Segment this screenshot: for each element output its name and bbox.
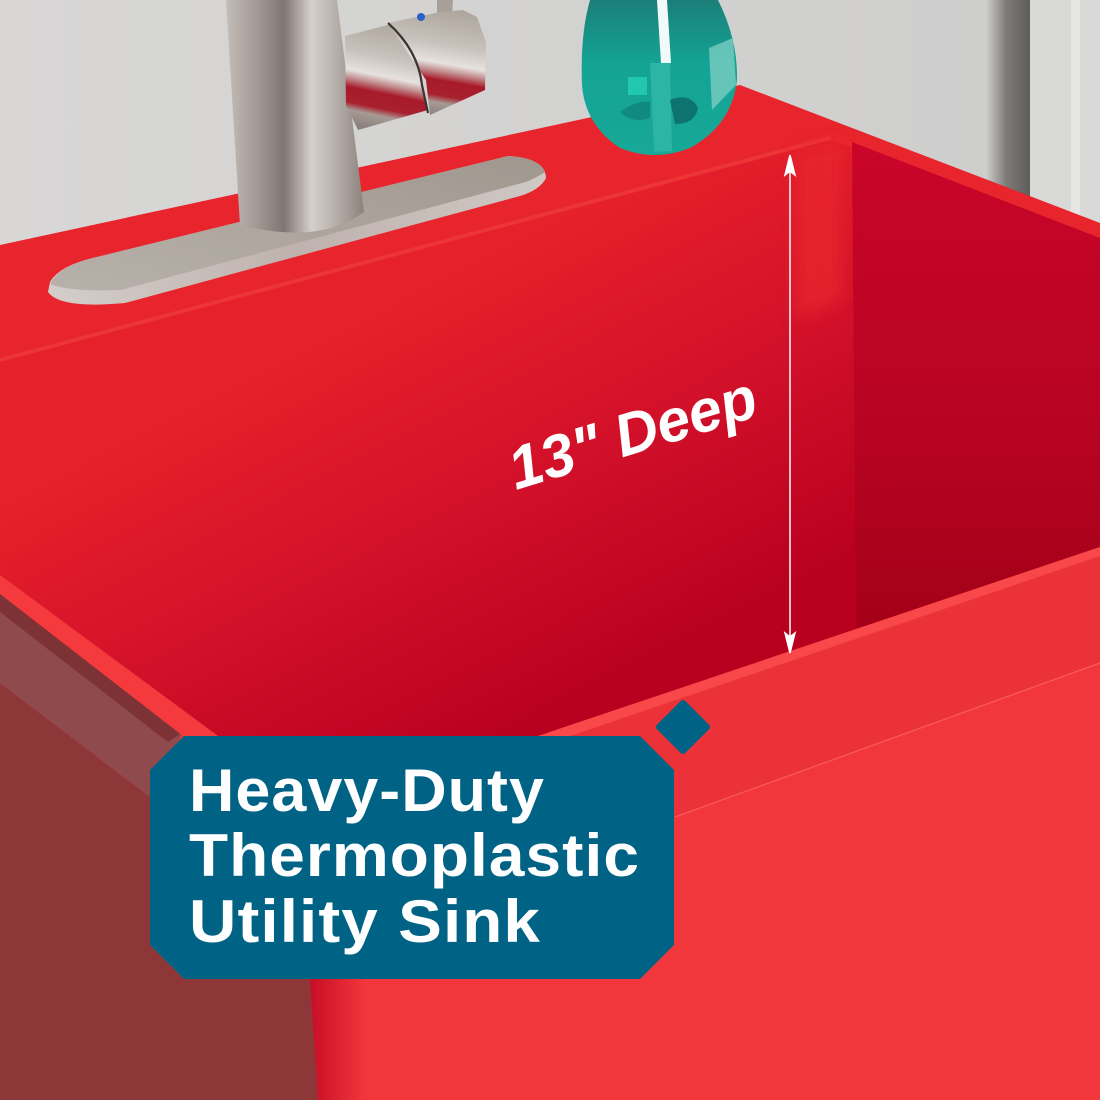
title text: Utility Sink xyxy=(189,888,541,955)
sink basin back wall xyxy=(0,140,860,736)
sink basin right wall xyxy=(852,142,1100,632)
product title badge xyxy=(150,736,674,979)
wall background xyxy=(0,0,1100,330)
sink left side xyxy=(0,575,318,1100)
sink front panel xyxy=(300,663,1100,1100)
deck highlight xyxy=(0,136,832,363)
icon: faucet xyxy=(226,0,486,233)
sink deck xyxy=(0,85,1100,600)
title text: Heavy-Duty xyxy=(189,757,545,824)
depth label: 13" Deep xyxy=(500,364,765,502)
basin corner glow xyxy=(795,140,842,320)
front right rim xyxy=(538,547,1100,817)
icon: soap bottle xyxy=(582,0,737,155)
faucet plate xyxy=(48,156,546,305)
title text: Thermoplastic xyxy=(189,822,640,889)
depth arrow xyxy=(785,155,795,653)
title text xyxy=(189,757,640,955)
icon: diamond marker xyxy=(655,699,711,755)
